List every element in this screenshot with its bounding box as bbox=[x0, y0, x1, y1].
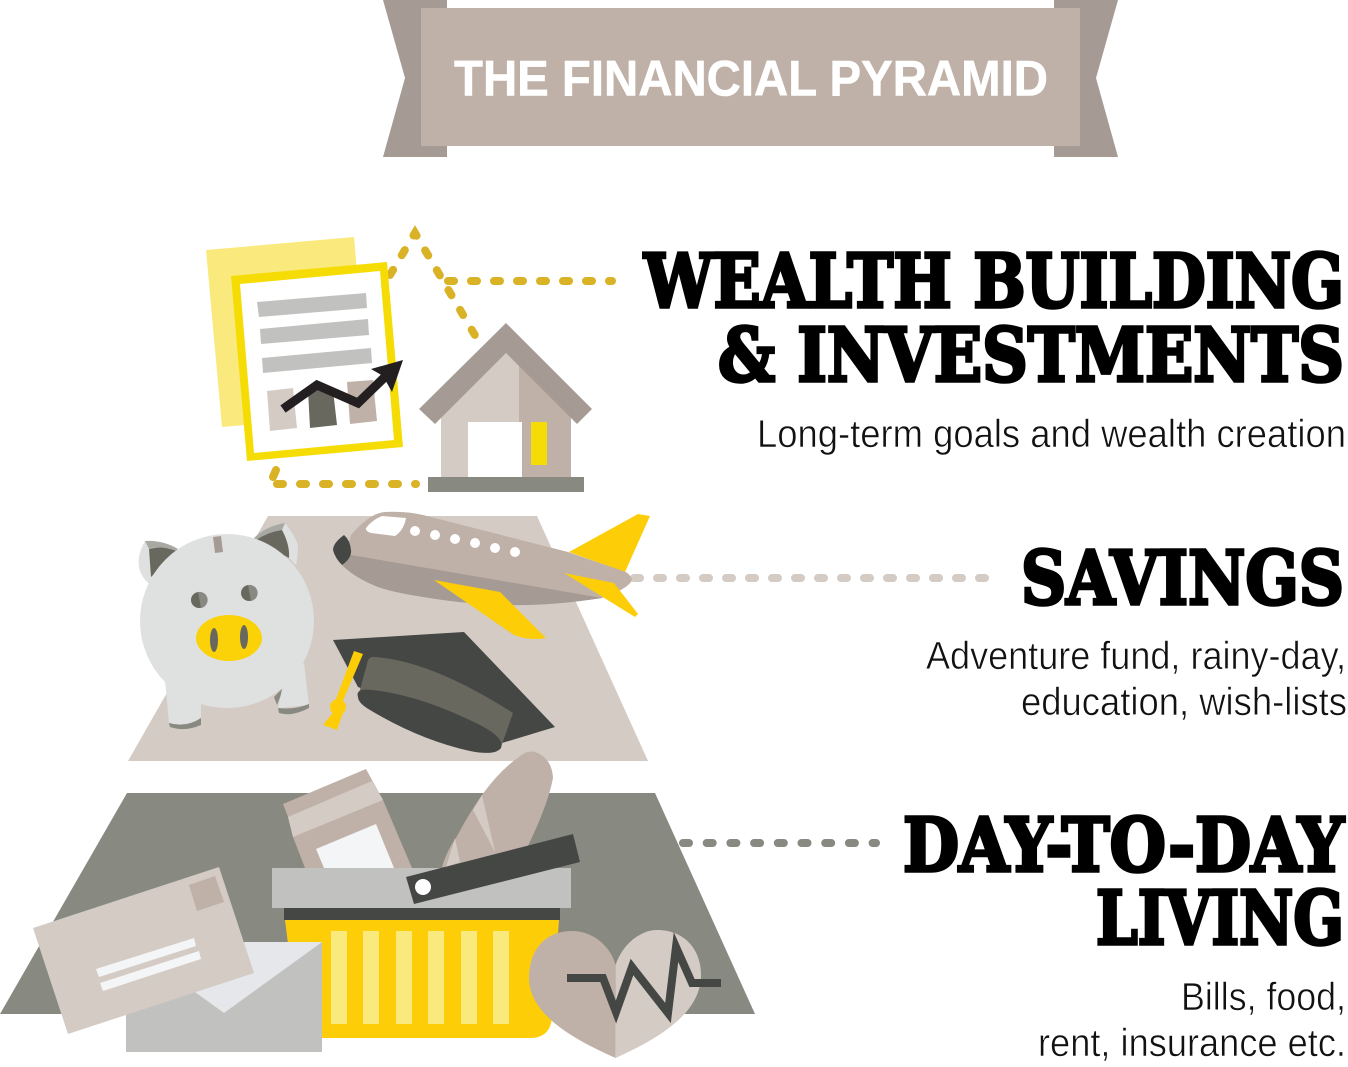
icon: growth arrow bbox=[283, 360, 403, 409]
panel: day-to-day tier bbox=[0, 793, 755, 1014]
title banner bbox=[383, 0, 1118, 157]
panel: savings tier bbox=[128, 516, 648, 761]
icon: baguette bbox=[442, 752, 553, 870]
text: day-to-day description bbox=[1038, 976, 1346, 1065]
icon: airplane bbox=[333, 512, 650, 639]
icon: open envelope bbox=[126, 942, 322, 1052]
dotted connector: wealth tier bbox=[273, 233, 612, 484]
heading: wealth building and investments bbox=[643, 239, 1344, 399]
text: savings description bbox=[926, 635, 1347, 724]
icon: piggy bank bbox=[139, 523, 314, 729]
dotted connector: day-to-day tier bbox=[683, 839, 876, 847]
icon: letter with stamp bbox=[33, 867, 254, 1034]
dotted connector: savings tier bbox=[634, 574, 988, 582]
icon: shopping basket bbox=[272, 834, 580, 1038]
title banner: THE FINANCIAL PYRAMID bbox=[454, 50, 1048, 106]
icon: house bbox=[419, 323, 592, 492]
icon: graduation cap bbox=[323, 632, 555, 753]
icon: heart with pulse bbox=[529, 930, 721, 1058]
heading: day-to-day living bbox=[903, 803, 1345, 962]
icon: grocery bag bbox=[283, 769, 412, 868]
icon: report document with chart bbox=[206, 237, 403, 461]
